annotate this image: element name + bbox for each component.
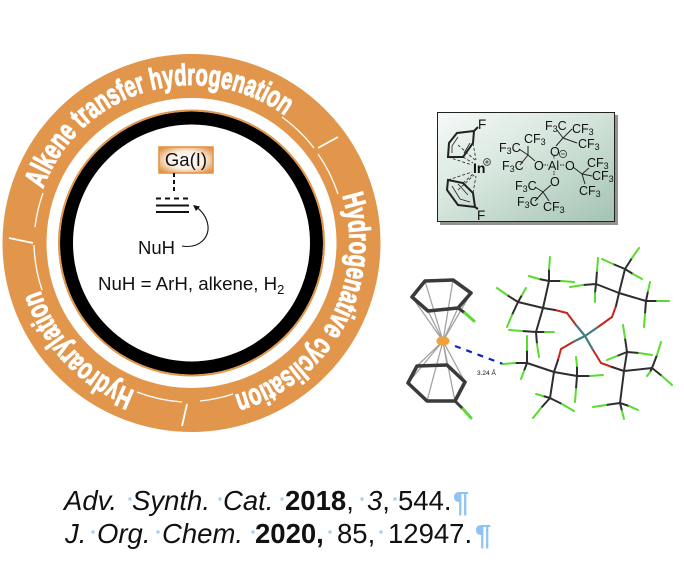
aluminate anion bonds bbox=[519, 129, 592, 201]
panel: indium complex structure: C bbox=[528, 179, 537, 193]
Al-O bonds bbox=[561, 313, 612, 363]
panel: indium complex structure: CF bbox=[572, 122, 589, 136]
band label: hydroarylation: Hydroarylation bbox=[26, 291, 134, 410]
citation: first reference: 2018, bbox=[285, 485, 354, 516]
panel: indium complex structure: F bbox=[478, 117, 486, 132]
In to ring spokes bbox=[408, 280, 471, 401]
citation: second reference: 85, bbox=[337, 518, 375, 549]
panel: indium complex structure: O bbox=[550, 145, 560, 159]
citation: first reference: Adv. bbox=[62, 485, 117, 516]
NuH definition: NuH = ArH, alkene, H bbox=[98, 273, 277, 294]
panel: indium complex structure: F bbox=[502, 159, 510, 173]
panel: indium complex structure bbox=[438, 112, 618, 225]
citation: second reference: J. bbox=[64, 518, 86, 549]
panel: indium complex structure: 3 bbox=[604, 161, 609, 171]
panel: indium complex structure: C bbox=[512, 141, 521, 155]
panel: indium complex structure: O bbox=[550, 175, 560, 189]
panel: indium complex structure: 3 bbox=[553, 124, 558, 134]
citation: first reference: Cat. bbox=[223, 485, 273, 516]
panel: indium complex structure: 3 bbox=[525, 200, 530, 210]
panel: indium complex structure: 3 bbox=[589, 127, 594, 137]
panel: indium complex structure: 3 bbox=[541, 137, 546, 147]
C-F bonds dark half bbox=[507, 258, 662, 411]
panel: indium complex structure: CF bbox=[543, 200, 560, 214]
panel: indium complex structure: F bbox=[517, 195, 525, 209]
panel: indium complex structure: C bbox=[530, 195, 539, 209]
indium atom bbox=[436, 336, 450, 346]
panel: indium complex structure: 3 bbox=[560, 205, 565, 215]
citation: first reference bbox=[62, 485, 469, 519]
arene rings bbox=[447, 127, 478, 209]
orange outer band bbox=[24, 76, 358, 410]
panel: indium complex structure: F bbox=[515, 179, 523, 193]
panel: indium complex structure: O bbox=[565, 159, 575, 173]
crystal structure: aluminate anion bbox=[497, 248, 672, 419]
panel: indium complex structure: 3 bbox=[609, 174, 614, 184]
contact distance bbox=[455, 346, 503, 364]
arene ring bottom bbox=[408, 365, 465, 401]
inner thin orange and black ring bbox=[66, 118, 316, 368]
citation: first reference: ¶ bbox=[453, 487, 469, 519]
C-C bonds bbox=[518, 269, 652, 403]
NuH label: NuH bbox=[138, 237, 175, 258]
band label: alkene transfer hydrogenation: Alkene transfer hydrogenation bbox=[25, 62, 292, 190]
arene ring top bbox=[412, 280, 471, 311]
citation: second reference: Org. bbox=[97, 518, 150, 549]
panel: indium complex structure: C bbox=[558, 119, 567, 133]
panel: indium complex structure: CF bbox=[579, 184, 596, 198]
panel: indium complex structure: F bbox=[545, 119, 553, 133]
panel: indium complex structure: In bbox=[473, 160, 485, 176]
panel: indium complex structure: Al bbox=[548, 159, 559, 173]
panel: indium complex structure: C bbox=[515, 159, 524, 173]
citation: second reference: ¶ bbox=[475, 520, 491, 552]
citation: second reference: Chem. bbox=[162, 518, 243, 549]
C-F bonds green half bbox=[497, 248, 672, 419]
panel: indium complex structure: CF bbox=[587, 156, 604, 170]
panel: indium complex structure: 3 bbox=[596, 189, 601, 199]
crystal structure: indium cation bbox=[408, 280, 503, 418]
curved arrow bbox=[182, 205, 208, 246]
panel: indium complex structure: 3 bbox=[523, 184, 528, 194]
band label: hydrogenative cyclisation: Hydrogenative cyclisation bbox=[235, 191, 372, 410]
citation: second reference: 2020, bbox=[255, 518, 324, 549]
panel: indium complex structure: O bbox=[534, 159, 544, 173]
NuH definition: 2 bbox=[277, 282, 284, 297]
panel: indium complex structure: CF bbox=[592, 169, 609, 183]
Ga(I) label box bbox=[159, 147, 213, 173]
Ga(I) label box: Ga(I) bbox=[165, 149, 207, 170]
substrate with dashed coordination bond bbox=[156, 173, 189, 212]
panel: indium complex structure: CF bbox=[578, 137, 595, 151]
citation: first reference: 544. bbox=[398, 485, 452, 516]
crystal structure: indium cation: 3.24 Å bbox=[477, 368, 496, 377]
citation: first reference: 3, bbox=[367, 485, 390, 516]
panel: indium complex structure: F bbox=[477, 208, 485, 223]
ring: reaction scope wheel bbox=[2, 54, 380, 432]
citation: second reference bbox=[64, 518, 491, 552]
panel: indium complex structure: 3 bbox=[510, 164, 515, 174]
panel: indium complex structure: 3 bbox=[507, 146, 512, 156]
panel: indium complex structure: F bbox=[499, 141, 507, 155]
panel: indium complex structure: CF bbox=[524, 132, 541, 146]
panel: indium complex structure: 3 bbox=[595, 142, 600, 152]
citation: first reference: Synth. bbox=[132, 485, 210, 516]
white separators on band bbox=[9, 117, 338, 426]
citation: second reference: 12947. bbox=[388, 518, 472, 549]
O-C bonds bbox=[555, 306, 616, 367]
